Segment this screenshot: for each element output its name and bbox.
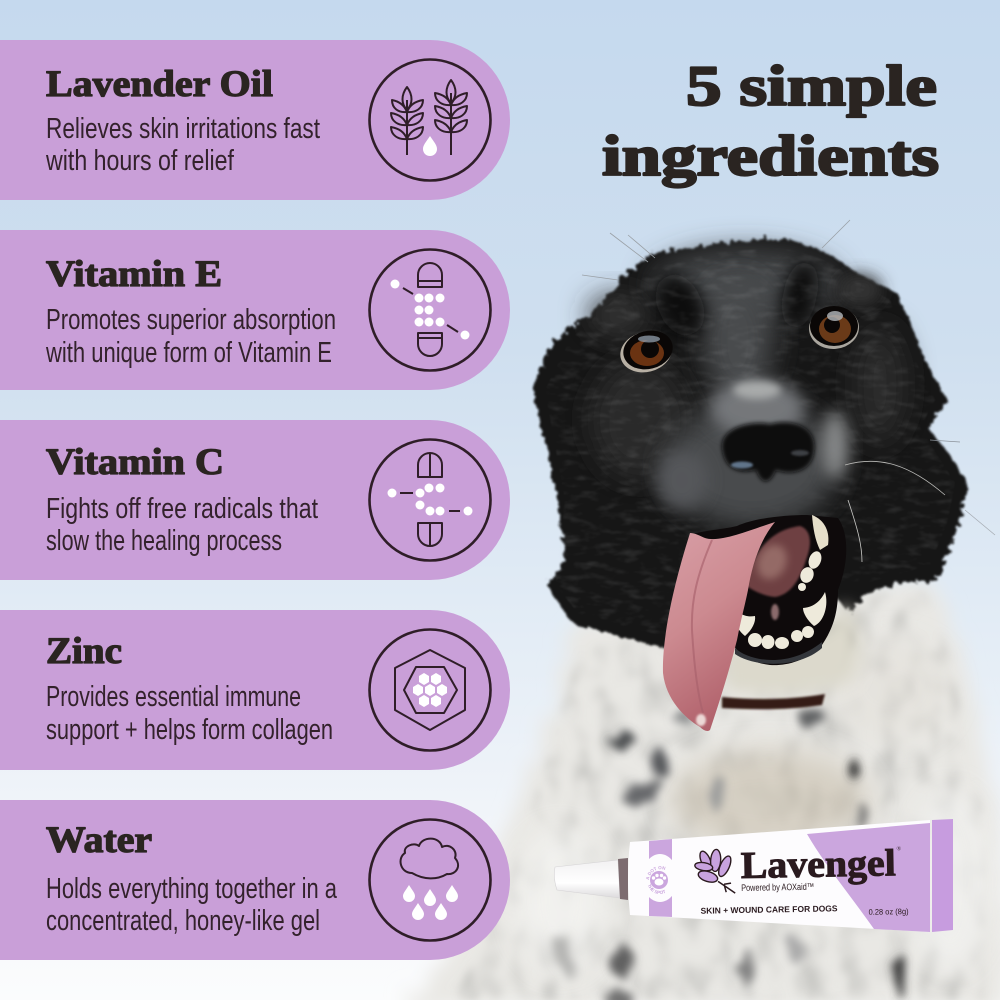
- description: Vitamin C: [46, 493, 318, 557]
- icon: rain cloud: [370, 820, 490, 940]
- description: Zinc: support + helps form collagen: [46, 714, 333, 746]
- description: Water: Holds everything together in a: [46, 873, 337, 905]
- panel: Vitamin E: [0, 230, 510, 390]
- tube body: A DOT ON: [646, 866, 666, 880]
- dog nose: [722, 422, 814, 481]
- tube label texts: 0.28 oz (8g): [869, 907, 909, 917]
- tube label texts: [694, 842, 909, 920]
- tube label texts: ®: [896, 845, 902, 852]
- dog tongue: [663, 522, 775, 731]
- tube label texts: Powered by AOXaid™: [741, 882, 814, 894]
- dog chin fur: [725, 605, 861, 695]
- dog head sheen and dark patches: [588, 249, 906, 480]
- panel: Vitamin C: [0, 420, 510, 580]
- dog head: black fur silhouette: [533, 238, 967, 647]
- dog left eye: [616, 326, 677, 378]
- tube label texts: Lavengel: [740, 842, 896, 887]
- heading: Lavender Oil: Lavender Oil: [46, 64, 273, 105]
- panel: Zinc: [0, 610, 510, 770]
- description: Lavender Oil: with hours of relief: [45, 145, 234, 177]
- product tube: [554, 819, 953, 932]
- panel: Lavender Oil: [0, 40, 510, 200]
- title: 5 simple: [686, 55, 937, 118]
- description: Vitamin C: Fights off free radicals that: [46, 493, 318, 525]
- icon: zinc hexagons: [370, 630, 490, 750]
- tube cap: [554, 858, 628, 900]
- description: Vitamin E: Promotes superior absorption: [46, 304, 336, 336]
- description: Zinc: [46, 681, 333, 746]
- description: Zinc: Provides essential immune: [46, 681, 301, 713]
- dog right eye: [807, 305, 861, 351]
- lavender logo: [694, 849, 735, 894]
- icon: vitamin C capsule: [370, 440, 490, 560]
- teeth: [730, 515, 828, 649]
- dog body: white speckled chest: [405, 580, 1000, 1000]
- dog mouth: [690, 515, 846, 665]
- description: Lavender Oil: [45, 113, 320, 177]
- panel: Water: [0, 800, 510, 960]
- title: [602, 55, 939, 188]
- title: ingredients: [602, 125, 939, 188]
- paw logo: [652, 874, 666, 886]
- description: Vitamin E: with unique form of Vitamin E: [45, 337, 332, 369]
- description: Vitamin E: [45, 304, 336, 369]
- icon: wheat and oil drop: [370, 60, 490, 180]
- icon: vitamin E capsule: [370, 250, 490, 370]
- dog muzzle: [656, 380, 849, 527]
- heading: Vitamin E: Vitamin E: [46, 254, 222, 295]
- dog collar: [722, 694, 825, 709]
- tube body: [628, 820, 930, 932]
- dog head fur texture: [545, 248, 955, 635]
- heading: Water: Water: [46, 820, 152, 861]
- description: Vitamin C: slow the healing process: [46, 525, 282, 557]
- description: Lavender Oil: Relieves skin irritations fast: [46, 113, 320, 145]
- chest spots: [559, 625, 907, 1000]
- lower lip: [735, 642, 822, 664]
- description: Water: [46, 873, 337, 937]
- tube crimp: [932, 819, 953, 932]
- heading: Vitamin C: Vitamin C: [46, 442, 224, 483]
- description: Water: concentrated, honey-like gel: [46, 905, 320, 937]
- heading: Zinc: Zinc: [46, 631, 122, 672]
- dog photo illustration: [405, 220, 1000, 1000]
- dog whiskers: [582, 220, 995, 562]
- tube body: THE SPOT: [648, 884, 665, 894]
- tube label texts: SKIN + WOUND CARE FOR DOGS: [700, 903, 838, 916]
